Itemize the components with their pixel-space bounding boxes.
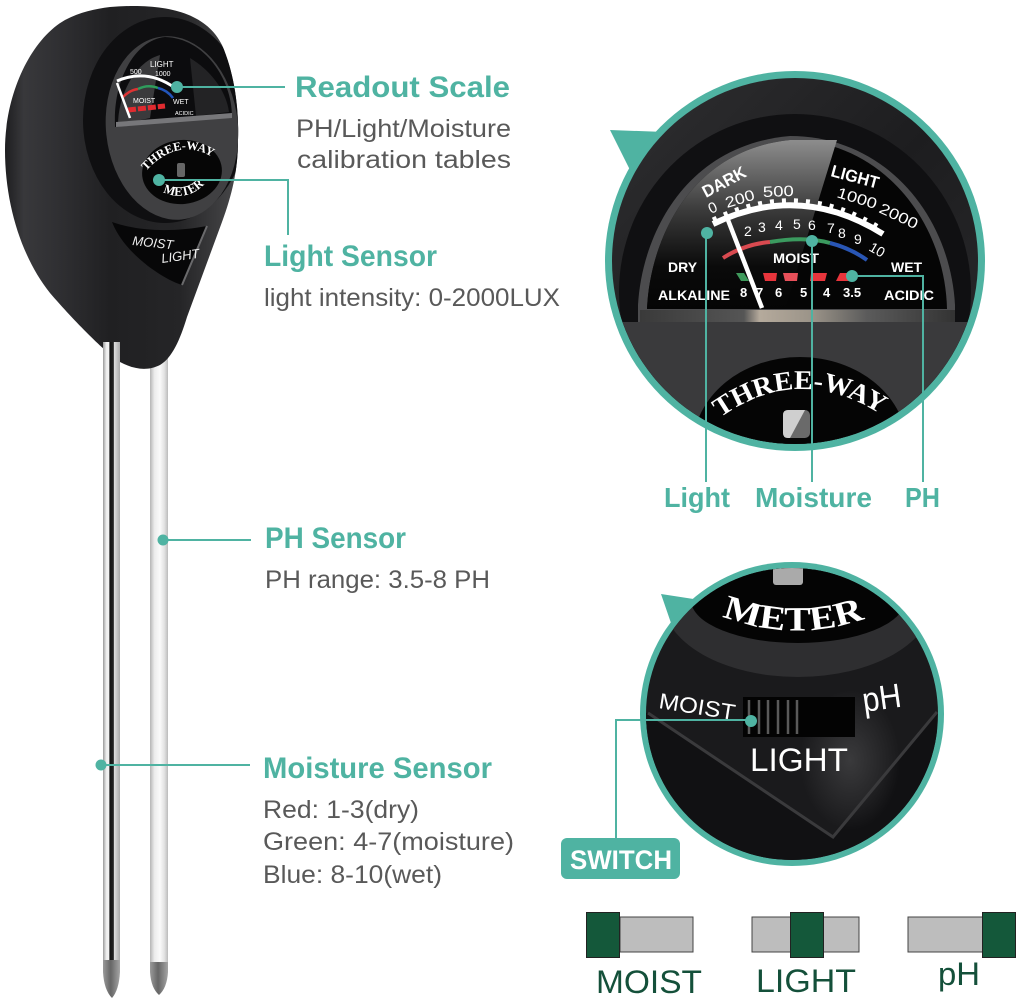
dial housing xyxy=(83,17,247,226)
callout: moisture sensor: Blue: 8-10(wet) xyxy=(263,861,442,889)
gauge window: 1000 xyxy=(155,71,171,78)
leaders: gauge scale labels: PH xyxy=(905,482,940,513)
ph scale bars xyxy=(736,273,850,281)
callout: light sensor xyxy=(153,174,560,312)
right steel probe xyxy=(150,350,168,995)
scale labels: ALKALINE xyxy=(658,287,730,303)
scale labels: 0 xyxy=(706,199,720,218)
switch diagram: ph xyxy=(908,912,1016,992)
scale labels: 4 xyxy=(775,217,783,233)
callout: readout scale: Readout Scale xyxy=(295,71,510,104)
gauge window: LIGHT xyxy=(150,60,174,69)
switch labels: MOIST xyxy=(657,688,737,725)
scale labels: 6 xyxy=(808,217,816,233)
scale labels: 5 xyxy=(800,285,807,300)
callout: switch badge xyxy=(561,715,757,879)
moist and light panel xyxy=(112,222,207,285)
scale labels: WET xyxy=(891,259,923,275)
gauge window: MOIST xyxy=(133,98,156,105)
leaders: gauge scale labels: Light xyxy=(664,482,730,513)
switch labels: pH xyxy=(860,677,904,720)
callout: ph sensor: PH range: 3.5-8 PH xyxy=(265,566,490,594)
light scale arc xyxy=(713,201,883,234)
three-way window: METER xyxy=(163,181,204,196)
three-way window xyxy=(140,140,222,204)
gauge window: 500 xyxy=(130,69,142,76)
left steel probe xyxy=(103,342,120,998)
scale labels: 7 xyxy=(827,220,835,236)
callout: readout scale: PH/Light/Moisture xyxy=(296,115,511,143)
callout: moisture sensor: Red: 1-3(dry) xyxy=(263,796,419,824)
callout: light sensor: light intensity: 0-2000LUX xyxy=(264,284,560,312)
callout: readout scale xyxy=(171,71,511,174)
scale labels: 500 xyxy=(763,183,794,201)
switch labels: LIGHT xyxy=(750,742,848,778)
scale labels: 10 xyxy=(866,239,888,260)
callout: moisture sensor xyxy=(96,752,514,889)
gauge window: ACIDIC xyxy=(175,111,194,117)
switch diagram: moist: MOIST xyxy=(596,964,702,1000)
switch diagram: ph: pH xyxy=(938,956,980,992)
scale labels xyxy=(658,162,934,303)
callout: moisture sensor: Green: 4-7(moisture) xyxy=(263,828,514,856)
circle frame xyxy=(605,71,985,451)
leaders: gauge scale labels xyxy=(664,227,940,513)
gauge window: WET xyxy=(173,99,189,106)
scale labels: 8 xyxy=(838,225,846,241)
scale labels: 6 xyxy=(775,285,782,300)
callout: ph sensor xyxy=(158,522,490,594)
needle xyxy=(728,220,762,308)
callout: switch badge: SWITCH xyxy=(570,845,672,875)
scale labels: 2000 xyxy=(876,200,921,233)
leaders: gauge scale labels: Moisture xyxy=(755,482,872,513)
circle frame xyxy=(640,562,944,866)
switch diagram: moist xyxy=(586,912,702,1000)
callout: moisture sensor: Moisture Sensor xyxy=(263,752,492,785)
scale labels: ACIDIC xyxy=(884,287,934,303)
scale labels: DRY xyxy=(668,259,698,275)
callout: light sensor: Light Sensor xyxy=(264,240,437,273)
panel: switch close-up xyxy=(640,562,944,866)
scale labels: 4 xyxy=(823,285,831,300)
scale labels: 5 xyxy=(793,216,801,232)
three-way label xyxy=(699,357,898,444)
switch diagram: light xyxy=(752,912,859,999)
scale labels: LIGHT xyxy=(829,162,882,193)
scale labels: 1000 xyxy=(835,185,879,213)
scale labels: DARK xyxy=(699,162,750,202)
scale labels: MOIST xyxy=(773,250,819,266)
scale labels: 3.5 xyxy=(843,285,861,300)
scale labels: 7 xyxy=(756,285,763,300)
callout: readout scale: calibration tables xyxy=(297,146,511,174)
slide switch xyxy=(743,697,855,737)
scale labels: 3 xyxy=(758,219,766,235)
three-way label: THREE-WAY xyxy=(710,371,889,416)
switch artwork: METER xyxy=(722,596,866,630)
switch labels xyxy=(660,684,900,772)
callout: ph sensor: PH Sensor xyxy=(265,522,406,555)
scale labels: 200 xyxy=(723,187,757,212)
meter body xyxy=(5,6,238,369)
gauge dome xyxy=(638,136,955,322)
gauge artwork xyxy=(612,78,978,444)
base strip xyxy=(640,310,955,322)
callout pointer xyxy=(661,594,700,626)
switch diagram: light: LIGHT xyxy=(756,963,856,999)
moist and light panel: LIGHT xyxy=(160,246,201,266)
scale labels: 2 xyxy=(744,223,752,239)
callout pointer xyxy=(610,130,665,170)
scale labels: 8 xyxy=(740,285,747,300)
device: soil meter xyxy=(5,6,238,998)
scale labels: 9 xyxy=(854,231,862,247)
panel: gauge close-up xyxy=(605,71,985,451)
three-way window: THREE-WAY xyxy=(140,141,216,170)
switch artwork xyxy=(646,568,938,860)
moisture scale arc xyxy=(723,239,867,260)
moist and light panel: MOIST xyxy=(132,233,175,252)
gauge window xyxy=(115,37,232,127)
